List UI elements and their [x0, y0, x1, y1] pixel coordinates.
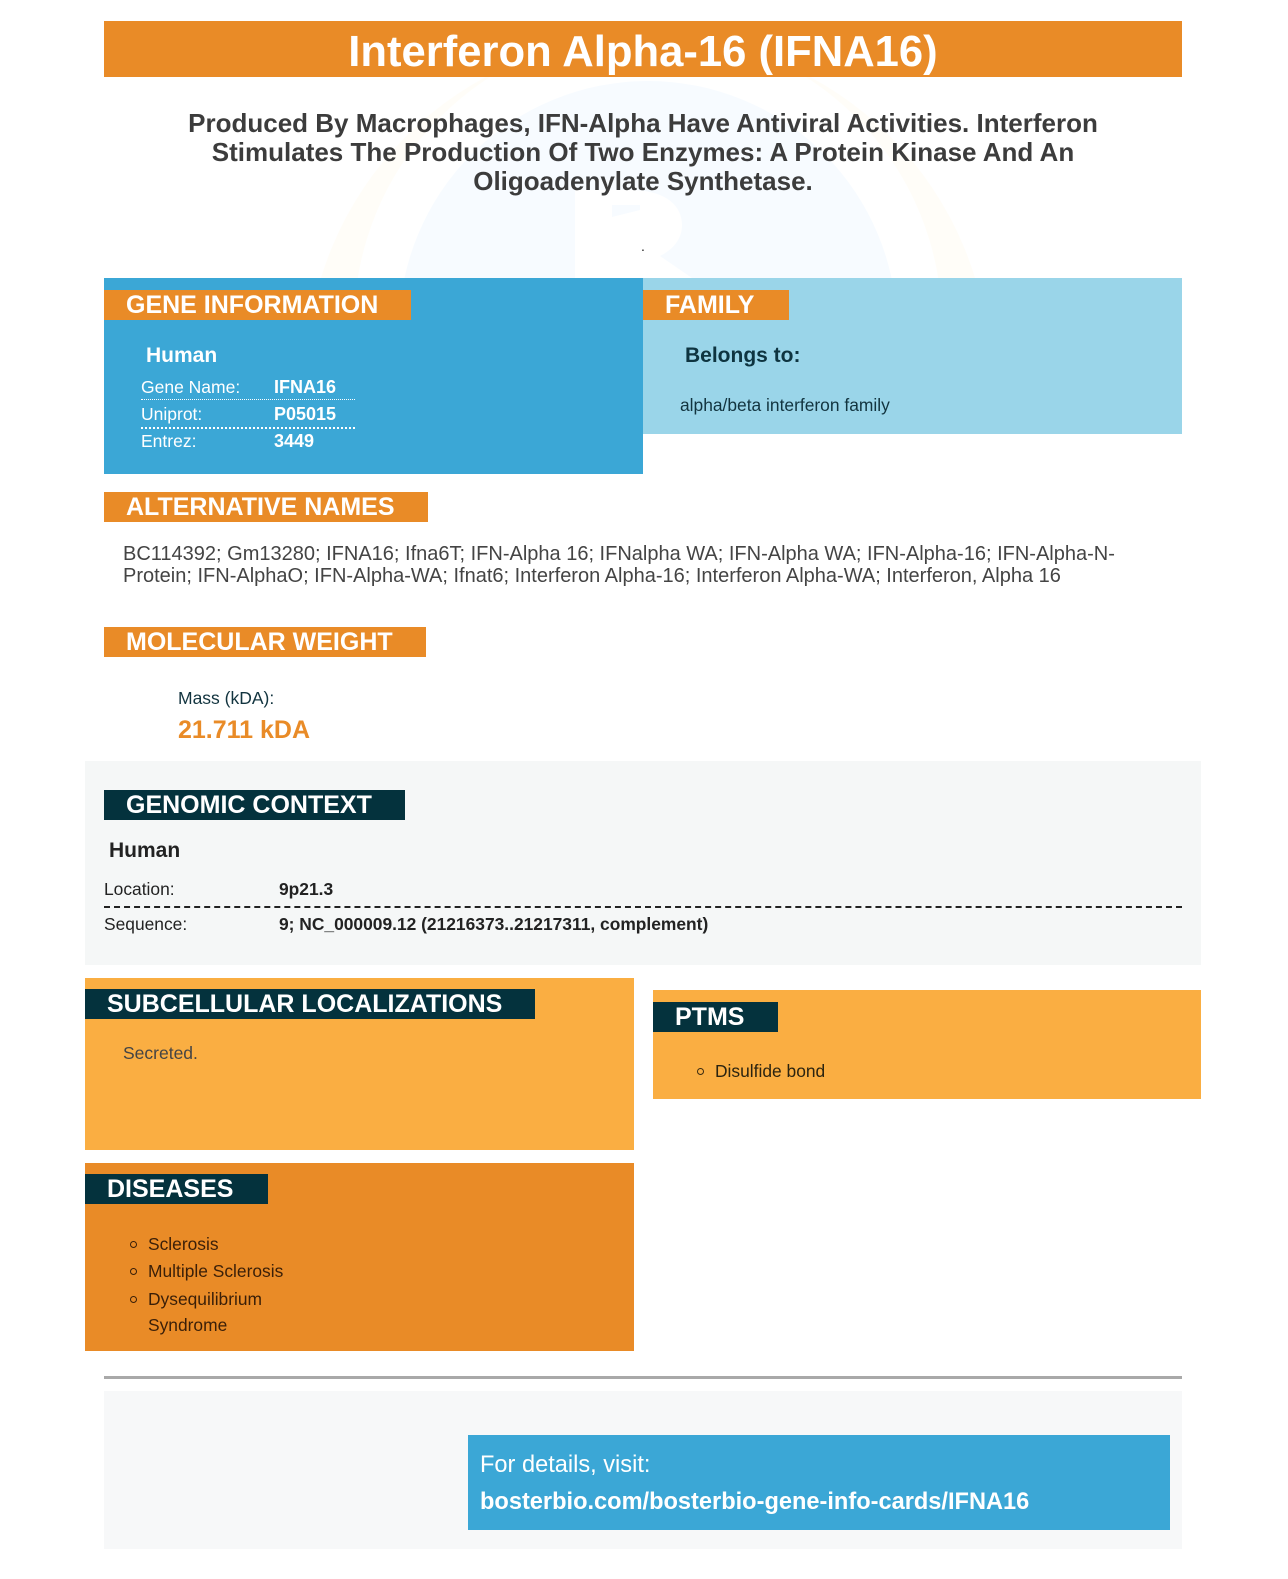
subtitle: Stimulates The Production Of Two Enzymes: A Protein Kinase And An [212, 137, 1074, 167]
ptm list item: Disulfide bond [715, 1061, 825, 1081]
disease list: Multiple Sclerosis [148, 1261, 283, 1281]
title banner [104, 21, 1182, 77]
disease list [130, 1234, 283, 1335]
panel: ptms [653, 990, 1201, 1099]
sequence row: 9; NC_000009.12 (21216373..21217311, complement) [279, 914, 708, 934]
uniprot row: Uniprot: [141, 404, 202, 424]
subtitle: Oligoadenylate Synthetase. [473, 166, 813, 196]
call to action box [468, 1435, 1170, 1530]
family text: alpha/beta interferon family [680, 395, 890, 415]
panel: genomic context [85, 761, 1201, 965]
location row [104, 875, 1182, 908]
alternative names text [123, 543, 1115, 587]
alternative names text: Protein; IFN-AlphaO; IFN-Alpha-WA; Ifnat6; Interferon Alpha-16; Interferon Alpha-WA; Interferon, Alpha 16 [123, 565, 1061, 587]
mass label: Mass (kDA): [178, 688, 274, 708]
url: bosterbio.com/bosterbio-gene-info-cards/IFNA16 [480, 1489, 1029, 1515]
species label: Human [109, 839, 180, 862]
uniprot row [141, 402, 355, 429]
title banner: Interferon Alpha-16 (IFNA16) [348, 28, 938, 76]
heading: subcellular localizations: SUBCELLULAR LOCALIZATIONS [107, 990, 502, 1018]
belongs to label: Belongs to: [685, 344, 800, 367]
background watermark logo [0, 77, 1288, 278]
heading: genomic context: GENOMIC CONTEXT [126, 791, 372, 819]
heading: diseases: DISEASES [107, 1175, 233, 1203]
panel: diseases [85, 1163, 634, 1351]
dot: . [641, 238, 645, 254]
uniprot row: P05015 [274, 404, 336, 424]
heading: diseases [85, 1174, 268, 1204]
heading: molecular weight: MOLECULAR WEIGHT [126, 628, 393, 656]
gene name row [141, 376, 355, 400]
heading: gene information: GENE INFORMATION [126, 291, 378, 319]
visit label: For details, visit: [480, 1452, 650, 1478]
subtitle [188, 108, 1098, 196]
species label: Human [146, 344, 217, 367]
entrez row [141, 431, 314, 451]
panel: subcellular localizations [85, 978, 634, 1150]
localization text: Secreted. [123, 1043, 198, 1063]
disease list: Dysequilibrium [148, 1289, 262, 1309]
entrez row: Entrez: [141, 431, 196, 451]
gene name row: IFNA16 [274, 377, 336, 397]
heading: family: FAMILY [665, 291, 754, 319]
panel: family [643, 278, 1182, 434]
heading: ptms: PTMS [675, 1003, 744, 1031]
footer panel [104, 1391, 1182, 1549]
panel: gene information [104, 278, 643, 474]
subtitle: Produced By Macrophages, IFN-Alpha Have Antiviral Activities. Interferon [188, 108, 1098, 138]
bullet [697, 1068, 704, 1075]
mass value: 21.711 kDA [178, 716, 310, 744]
disease list: Syndrome [148, 1315, 227, 1335]
entrez row: 3449 [274, 431, 314, 451]
heading: ptms [653, 1002, 778, 1032]
gene name row: Gene Name: [141, 377, 240, 397]
disease list: Sclerosis [148, 1234, 219, 1254]
heading: family [643, 290, 789, 320]
alternative names text: BC114392; Gm13280; IFNA16; Ifna6T; IFN-Alpha 16; IFNalpha WA; IFN-Alpha WA; IFN-Alpha-16; IFN-Alpha-N- [123, 543, 1115, 565]
location row: 9p21.3 [279, 879, 333, 899]
location row: Location: [104, 879, 175, 899]
sequence row: Sequence: [104, 914, 187, 934]
heading: alternative names: ALTERNATIVE NAMES [126, 493, 395, 521]
